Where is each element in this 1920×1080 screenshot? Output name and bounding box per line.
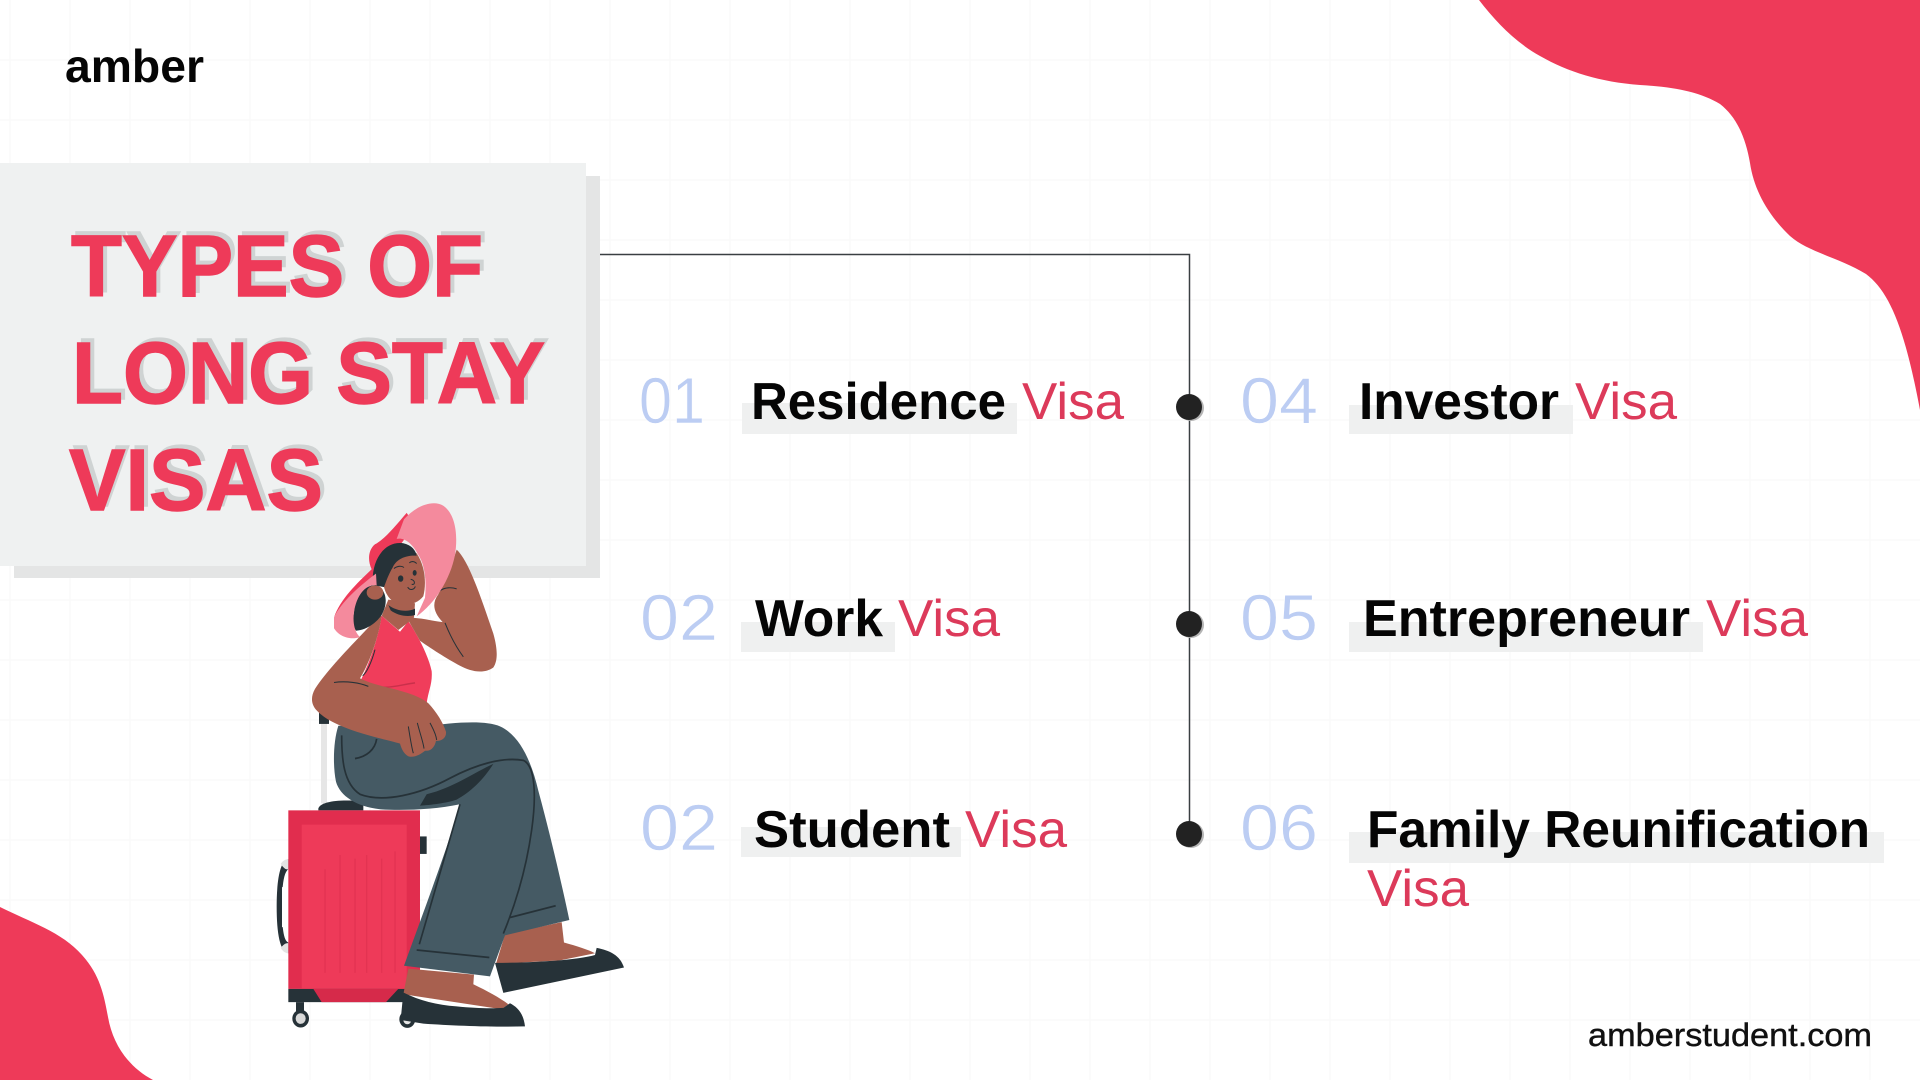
timeline dots — [1176, 394, 1204, 848]
illustration: woman sitting on red suitcase — [277, 503, 624, 1028]
suitcase — [277, 713, 427, 1028]
footer: website: amberstudent.com — [1588, 1017, 1872, 1053]
title: types of long stay visas: TYPES OF — [71, 218, 483, 315]
item 04: investor visa: Visa — [1575, 373, 1677, 431]
item 04: investor visa: Investor — [1359, 373, 1559, 431]
near foot and shoe — [401, 969, 525, 1027]
item 06: family reunification visa: Visa — [1367, 860, 1469, 918]
item 06: family reunification visa: 06 — [1240, 791, 1318, 864]
item 05: entrepreneur visa: Visa — [1706, 590, 1808, 648]
item 02 (third row): student visa: 02 — [640, 791, 718, 864]
panel: title card — [0, 163, 600, 578]
item 02 (third row): student visa — [640, 791, 1067, 864]
title: types of long stay visas: LONG STAY — [72, 325, 545, 422]
hair bun — [353, 585, 386, 631]
item 01: residence visa: Visa — [1022, 373, 1124, 431]
lower arm resting on knee — [312, 615, 446, 757]
blob: top right corner — [1479, 0, 1920, 410]
hat pink brim — [334, 503, 456, 638]
title: types of long stay visas: VISAS — [69, 432, 323, 529]
hair top — [373, 543, 417, 587]
item 01: residence visa: Residence — [751, 373, 1006, 431]
torso and top — [360, 616, 432, 703]
far foot and shoe — [495, 922, 624, 993]
item 05: entrepreneur visa: 05 — [1240, 581, 1318, 654]
neck and head — [367, 551, 425, 630]
trousers — [334, 722, 569, 976]
item 05: entrepreneur visa — [1240, 581, 1808, 654]
hat back brim — [334, 513, 413, 617]
item 01: residence visa: 01 — [639, 364, 705, 437]
item 02 (third row): student visa: Visa — [965, 801, 1067, 859]
face details — [394, 562, 417, 589]
item 01: residence visa — [639, 364, 1124, 437]
item 02: work visa: 02 — [640, 581, 718, 654]
item 02: work visa — [640, 581, 1000, 654]
item 06: family reunification visa — [1240, 791, 1884, 918]
item 04: investor visa — [1240, 364, 1677, 437]
item 02 (third row): student visa: Student — [754, 801, 950, 859]
logo: amber: amber — [65, 40, 204, 92]
item 06: family reunification visa: Family Reunification — [1367, 801, 1870, 859]
connector: timeline line — [600, 254, 1190, 834]
title: types of long stay visas — [69, 218, 545, 529]
blob: bottom left corner — [0, 907, 153, 1080]
item 05: entrepreneur visa: Entrepreneur — [1363, 590, 1690, 648]
item 04: investor visa: 04 — [1240, 364, 1318, 437]
item 02: work visa: Work — [755, 590, 883, 648]
item 02: work visa: Visa — [898, 590, 1000, 648]
upper arm raised to hat — [407, 550, 497, 671]
